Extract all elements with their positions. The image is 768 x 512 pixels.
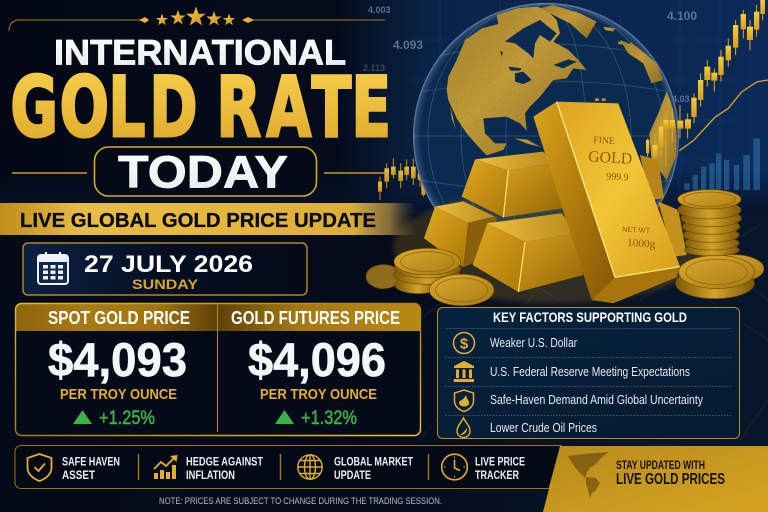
decorative header with stars (9, 6, 385, 31)
main gold bar: FINE (593, 135, 615, 147)
main gold bar: NET WT (622, 225, 651, 235)
globe (413, 3, 679, 269)
chart: blue volume bars (684, 138, 760, 190)
factor: federal reserve (454, 361, 690, 382)
coins left (366, 248, 494, 306)
coins front right (676, 255, 764, 299)
label: global market update: UPDATE (334, 468, 371, 482)
label: safe haven asset: ASSET (62, 468, 96, 482)
title: INTERNATIONAL (54, 34, 346, 72)
panel: stay updated: LIVE GOLD PRICES (616, 471, 725, 488)
gold futures price: PER TROY OUNCE (260, 386, 377, 403)
icon: rising chart (154, 455, 178, 479)
chart: left candlesticks (378, 158, 425, 200)
spot gold price: PER TROY OUNCE (60, 386, 177, 403)
hudson bay and great lakes (500, 20, 577, 84)
factor: weaker dollar: $ (460, 336, 469, 352)
main gold bar: 1000g (627, 237, 656, 251)
chart: right candlesticks (646, 0, 768, 167)
factor: weaker dollar: Weaker U.S. Dollar (490, 335, 578, 350)
panel: benefits strip (15, 446, 561, 488)
label: global market update: GLOBAL MARKET (334, 454, 414, 468)
title: GOLD RATE (10, 60, 391, 156)
chart: faint price labels: 4.100 (667, 9, 697, 23)
ribbon: live global gold price update (0, 203, 415, 235)
icon: clock (442, 454, 467, 480)
gold bars and coins (366, 102, 764, 306)
panel: prices (16, 304, 420, 436)
date box: 27 JULY 2026 (84, 251, 253, 278)
gold continents (447, 5, 640, 155)
label: hedge against inflation: HEDGE AGAINST (186, 454, 264, 468)
icon: shield (28, 454, 52, 481)
gold land on far limb (620, 40, 677, 180)
spot gold price (48, 308, 190, 429)
spot gold price: +1.25% (99, 407, 155, 429)
label: safe haven asset (62, 454, 120, 482)
gold bars behind (424, 152, 687, 292)
factor: safe haven demand: Safe-Haven Demand Amid Global Uncertainty (490, 392, 703, 407)
factor: weaker dollar (454, 332, 578, 354)
chart: faint price labels (363, 5, 697, 104)
label: live price tracker: LIVE PRICE (475, 454, 525, 468)
panel: key factors: KEY FACTORS SUPPORTING GOLD (493, 309, 687, 325)
label: hedge against inflation (186, 454, 264, 482)
main gold bar: 999.9 (606, 171, 629, 184)
panel: key factors (438, 308, 740, 438)
factor: federal reserve: U.S. Federal Reserve Meeting Expectations (490, 364, 690, 379)
gold futures price: +1.32% (301, 407, 357, 429)
label: live price tracker (475, 454, 525, 482)
icon: globe (298, 455, 322, 479)
chart: faint price labels: 4.093 (393, 38, 423, 52)
spot gold price: $4,093 (48, 333, 187, 386)
label: safe haven asset: SAFE HAVEN (62, 454, 120, 468)
stars (156, 6, 235, 26)
today badge: TODAY (118, 146, 288, 198)
factor: safe haven demand (454, 390, 703, 412)
main gold bar (533, 102, 680, 303)
ribbon: live global gold price update: LIVE GLOBAL GOLD PRICE UPDATE (20, 210, 376, 232)
label: hedge against inflation: INFLATION (186, 468, 235, 482)
gold futures price: GOLD FUTURES PRICE (231, 308, 400, 328)
factor: crude oil: Lower Crude Oil Prices (490, 420, 597, 435)
panel: stay updated: STAY UPDATED WITH (616, 458, 705, 472)
chart: faint price labels: 2.113 (363, 63, 385, 73)
today badge (12, 146, 385, 198)
date box: SUNDAY (132, 276, 199, 292)
factor: crude oil (457, 418, 597, 438)
label: live price tracker: TRACKER (475, 468, 519, 482)
chart: faint price labels: 4.03 (672, 94, 690, 104)
note: NOTE: PRICES ARE SUBJECT TO CHANGE DURING THE TRADING SESSION. (159, 496, 442, 506)
main gold bar: GOLD (588, 149, 633, 168)
coin stack right (678, 190, 741, 256)
icon: calendar (38, 252, 68, 284)
gold futures price: $4,096 (248, 333, 386, 386)
label: global market update (334, 454, 414, 482)
spot gold price: SPOT GOLD PRICE (48, 308, 190, 328)
gold futures price (231, 308, 400, 429)
date box (23, 243, 307, 295)
panel: stay updated (543, 446, 768, 512)
icon: world map (568, 452, 609, 498)
chart: faint price labels: 4.003 (368, 5, 391, 15)
